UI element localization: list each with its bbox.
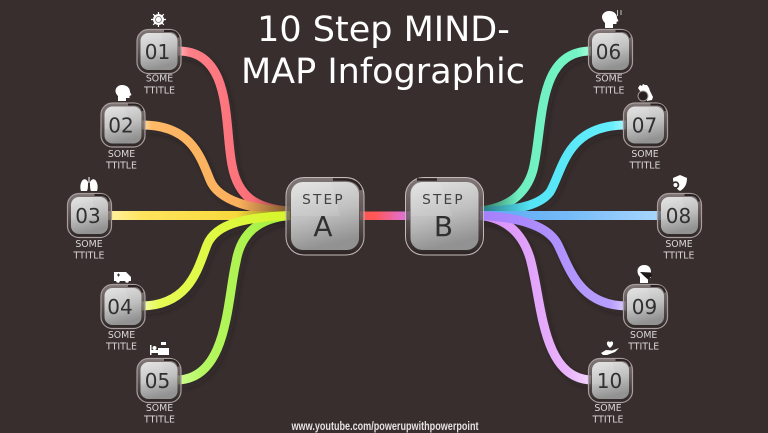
icon: hands and face	[638, 84, 653, 101]
ribbon 10	[480, 216, 591, 380]
ribbon 07	[480, 125, 626, 212]
icon: head	[116, 85, 132, 101]
icon: hospital bed	[150, 342, 169, 355]
icon: virus	[151, 12, 166, 27]
node 02: TTITLE	[105, 160, 137, 172]
node 06: SOME	[595, 74, 623, 84]
node 08	[658, 175, 702, 262]
ribbon 08	[480, 211, 661, 220]
node 04: SOME	[108, 330, 135, 341]
step A tile: STEP	[302, 192, 345, 208]
step A tile	[286, 178, 364, 255]
node 07	[624, 84, 668, 172]
icon: hand with heart	[601, 341, 619, 355]
step B tile: STEP	[422, 192, 465, 208]
node 10: 10	[597, 369, 622, 393]
node 03: SOME	[75, 239, 103, 250]
node 04	[101, 272, 145, 353]
icon: head with drops	[602, 10, 622, 28]
node 03: TTITLE	[73, 251, 105, 262]
ribbon 01	[178, 51, 290, 211]
node 01	[137, 12, 181, 96]
node 07: SOME	[631, 149, 659, 160]
node 07: TTITLE	[629, 160, 661, 172]
node 01: TTITLE	[143, 86, 175, 96]
node 02	[101, 85, 145, 172]
node 06: TTITLE	[593, 86, 625, 96]
node 01: SOME	[146, 74, 173, 84]
footer url: www.youtube.com/powerupwithpowerpoint	[291, 419, 479, 433]
icon: shield with virus	[672, 175, 687, 191]
ribbon 09	[480, 216, 626, 306]
node 08: 08	[666, 204, 691, 228]
node 10: SOME	[594, 403, 622, 414]
ribbon 03	[108, 211, 290, 220]
node 07: 07	[632, 114, 657, 138]
ribbon: A to B connector	[360, 212, 410, 220]
icon: ambulance	[114, 272, 131, 283]
node 10	[588, 341, 632, 426]
title: 10 Step MIND-	[257, 10, 510, 50]
node 06	[588, 10, 632, 96]
node 09: 09	[632, 295, 657, 319]
node 01: 01	[145, 40, 170, 64]
step B tile	[406, 178, 484, 255]
node 05	[137, 342, 181, 426]
node 05: TTITLE	[143, 415, 175, 426]
node 05: SOME	[146, 403, 173, 414]
node 04: 04	[107, 295, 133, 319]
node 10: TTITLE	[592, 415, 624, 426]
ribbon shadows	[145, 55, 629, 384]
ribbon 04	[142, 216, 290, 306]
node 04: TTITLE	[105, 342, 137, 353]
ribbon 02	[142, 125, 290, 211]
step A tile: A	[313, 210, 333, 243]
ribbon 05	[178, 216, 290, 380]
node 09: SOME	[630, 330, 657, 341]
icon: head with mask	[638, 265, 652, 283]
step B tile: B	[434, 210, 453, 243]
node 02: SOME	[108, 149, 135, 160]
title: MAP Infographic	[241, 52, 525, 92]
node 02: 02	[108, 114, 134, 138]
node 05: 05	[145, 369, 170, 393]
icon: lungs	[80, 177, 98, 191]
ribbon 06	[480, 51, 591, 211]
node 08: SOME	[665, 239, 693, 250]
node 03: 03	[75, 204, 101, 228]
node 06: 06	[596, 40, 621, 64]
node 08: TTITLE	[663, 251, 695, 262]
node 03	[68, 177, 112, 262]
node 09: TTITLE	[627, 342, 659, 353]
node 09	[624, 265, 668, 353]
